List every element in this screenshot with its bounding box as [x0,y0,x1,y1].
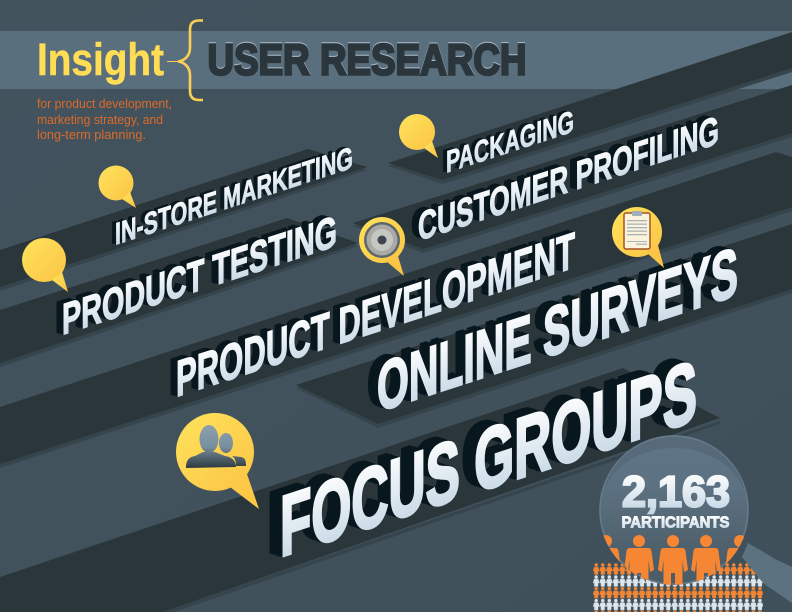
stripe: online surveys [296,224,792,428]
title: User Research: USER RESEARCH [208,36,526,84]
magnifier [591,435,792,603]
bubble: in-store marketing [98,166,136,208]
magnifier lens [599,435,749,585]
large orange people [604,535,744,585]
stripe: packaging [388,32,792,184]
bubble: clipboard [612,207,664,268]
stripe: product testing [0,218,358,367]
subtitle text: marketing strategy, and [37,112,163,127]
subtitle text: long-term planning. [37,127,146,142]
subtitle text [37,96,172,142]
stripe: in-store marketing [0,149,367,291]
magnifier handle [742,543,792,603]
stripe: focus groups [0,368,720,612]
participants icon grid [593,563,763,612]
bubble: packaging [399,114,438,158]
label: in-store marketing: IN-STORE MARKETING [115,139,353,252]
label: product testing: PRODUCT TESTING [62,206,337,345]
participants label: PARTICIPANTS [622,514,730,532]
label: packaging: PACKAGING [446,103,574,180]
participant count: 2,163 [622,468,730,516]
subtitle text: for product development, [37,96,172,111]
header band [0,31,792,89]
stripe: customer profiling [353,85,792,253]
title: Insight: Insight [37,34,164,85]
bubble: product testing [22,238,68,292]
brace [167,20,203,100]
bubble: focus group people [176,413,259,509]
bubble: camera lens [359,217,405,276]
stripe: product development [0,152,792,468]
